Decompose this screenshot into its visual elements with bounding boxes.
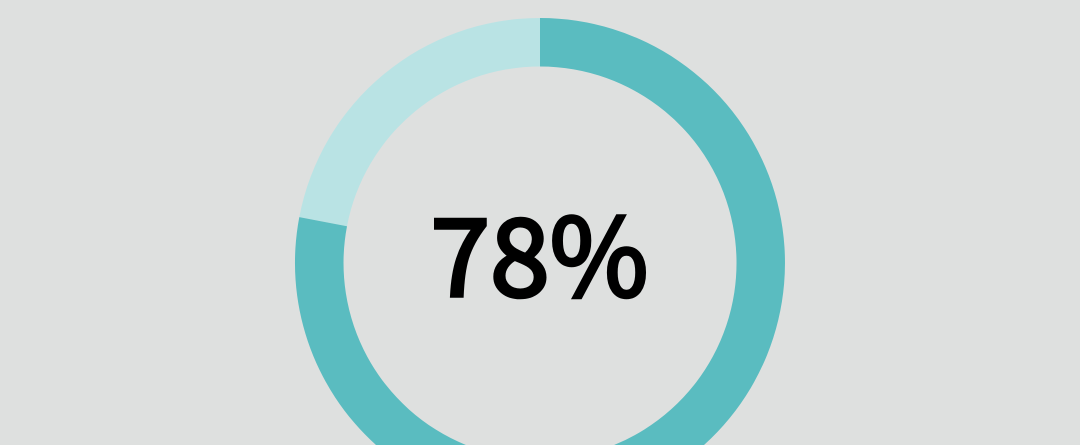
ring: 78% segment	[295, 18, 785, 445]
percentage label: 78%	[430, 172, 648, 327]
ring: remaining 22% segment	[299, 18, 540, 226]
